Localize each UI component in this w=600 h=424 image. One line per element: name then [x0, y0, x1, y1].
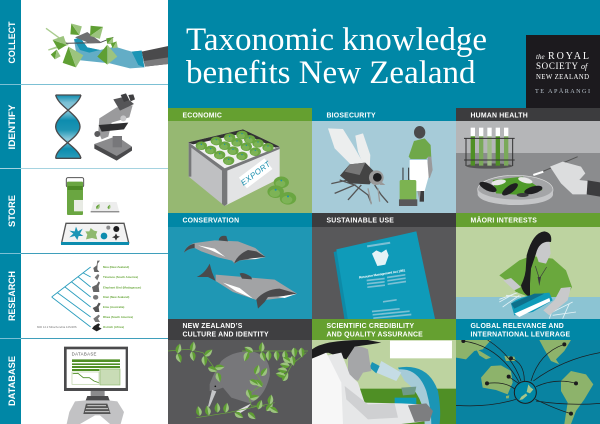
icon: computer with database screen and typing hands: [64, 347, 128, 424]
illustration: microscope: [370, 361, 440, 424]
panel heading: conservation: CONSERVATION: [182, 218, 239, 224]
chart: tree labels: Moa (New Zealand): [103, 265, 129, 269]
illustration: scientist in lab coat: [312, 340, 433, 424]
world map: connection lines: [456, 339, 600, 416]
white label box: [390, 341, 452, 358]
panel: global relevance and international leverage: [456, 319, 600, 424]
panel: biosecurity: [312, 108, 456, 213]
icon: gloved hand holding insect on leaves: [46, 20, 168, 71]
title: Taxonomic knowledge: [186, 22, 487, 58]
step label: database: DATABASE: [7, 355, 18, 406]
panel heading: global relevance: GLOBAL RELEVANCE AND: [470, 323, 564, 330]
chart: tree labels: Elephant Bird (Madagascar): [103, 286, 141, 290]
illustration: traveller with suitcase: [399, 126, 433, 206]
icon: open book of pressed plants: [91, 202, 119, 212]
icon: microscope: [94, 93, 135, 161]
panel: New Zealand's culture and identity: [168, 319, 312, 424]
illustration: export crate of apples: [188, 129, 296, 206]
illustration: flax strands: [499, 292, 576, 319]
illustration: gloved hand with tweezers: [533, 157, 600, 197]
header band: [168, 0, 600, 108]
illustration: petri dish of mussels: [478, 175, 553, 205]
illustration: upper Hector's dolphin: [184, 236, 266, 264]
panel heading: biosecurity: [312, 108, 456, 121]
chart: tree labels: Kiwi (New Zealand): [103, 295, 129, 299]
illustration: Resource Management Act document: Resource Management Act 1991: [359, 268, 406, 280]
illustration: Resource Management Act document: [334, 231, 435, 320]
panel: Māori interests: [456, 213, 600, 319]
panel heading: scientific credibility: [312, 319, 456, 340]
illustration: kiwi bird: [208, 352, 270, 414]
illustration: fern fronds: [168, 341, 308, 421]
New Zealand roundel: [514, 381, 536, 403]
step label: identify: IDENTIFY: [7, 104, 18, 150]
title: [186, 22, 487, 91]
logo: Royal Society of New Zealand: SOCIETY: [536, 61, 578, 71]
illustration: test tube rack: [464, 128, 515, 169]
panel heading: global relevance: INTERNATIONAL LEVERAGE: [470, 332, 571, 338]
panel heading: Māori interests: MĀORI INTERESTS: [470, 216, 537, 224]
panel heading: economic: ECONOMIC: [182, 112, 222, 120]
world map: continents: [456, 340, 593, 424]
panel heading: economic: [168, 108, 312, 121]
illustration: woman weaving: [499, 231, 572, 317]
title: benefits New Zealand: [186, 55, 476, 91]
logo: Royal Society of New Zealand: the: [536, 53, 545, 61]
panel: economic: [168, 108, 312, 213]
panel: sustainable use: [312, 213, 456, 320]
panel heading: scientific credibility: AND QUALITY ASSURANCE: [326, 332, 423, 338]
panel heading: Māori interests: [456, 213, 600, 227]
panel heading: conservation: [168, 213, 312, 227]
chart: tree labels: Tinamou (South America): [103, 275, 138, 279]
logo: Royal Society of New Zealand: [526, 35, 600, 108]
icon: specimen tray: [61, 223, 129, 245]
panel heading: biosecurity: BIOSECURITY: [326, 112, 376, 120]
label: export tag: EXPORT: [239, 159, 273, 187]
step label: research: RESEARCH: [7, 271, 18, 321]
chart: tree labels: Emu (Australia): [103, 305, 124, 309]
panel: scientific credibility and quality assurance: [312, 319, 456, 424]
chart: tree labels: Ostrich (Africa): [103, 325, 124, 329]
panel heading: New Zealand's culture and identity: CULTURE AND IDENTITY: [182, 332, 269, 338]
chart: tree labels: Rhea (South America): [103, 315, 133, 319]
icon: computer with database screen and typing hands: DATABASE: [72, 351, 97, 356]
icon: specimen jar: [66, 178, 84, 215]
illustration: fly: [328, 128, 388, 204]
step label: collect: COLLECT: [7, 21, 18, 64]
chart: tree labels: [37, 265, 141, 329]
sidebar: workflow steps: [0, 0, 168, 424]
panel: human health: [456, 108, 600, 213]
logo: Royal Society of New Zealand: TE APĀRANGI: [535, 88, 590, 95]
panel heading: human health: [456, 108, 600, 121]
chart: tree labels: MtD 12.2 Mitochondria 12S/28S: [37, 325, 77, 329]
logo: Royal Society of New Zealand: NEW ZEALAND: [536, 74, 589, 81]
logo: Royal Society of New Zealand: ROYAL: [548, 51, 589, 62]
step label: store: STORE: [7, 194, 18, 227]
logo: Royal Society of New Zealand: of: [581, 62, 589, 71]
panel heading: human health: HUMAN HEALTH: [470, 112, 528, 120]
panel heading: sustainable use: SUSTAINABLE USE: [326, 218, 394, 224]
panel: conservation: [168, 213, 312, 319]
panel heading: sustainable use: [312, 213, 456, 227]
icon: DNA helix: [56, 95, 81, 158]
panel heading: global relevance: [456, 319, 600, 340]
panel heading: New Zealand's culture and identity: NEW ZEALAND’S: [182, 323, 243, 330]
panel heading: New Zealand's culture and identity: [168, 319, 312, 340]
illustration: lower Hector's dolphin: [197, 264, 297, 309]
chart: ratite phylogenetic tree: [52, 261, 102, 331]
panel heading: scientific credibility: SCIENTIFIC CREDIBILITY: [326, 323, 415, 330]
